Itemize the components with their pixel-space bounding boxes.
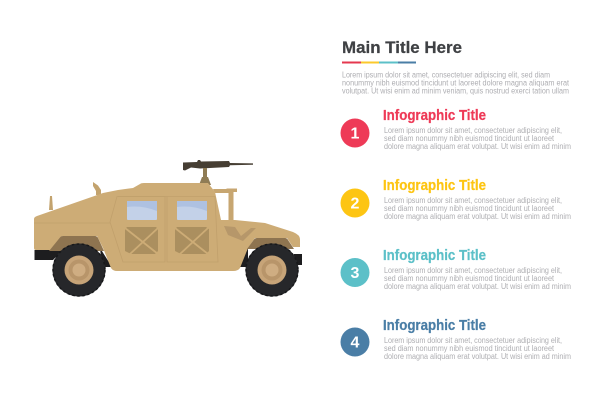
item 4 title: Infographic Title: [383, 318, 486, 334]
item 3 text: [384, 266, 571, 291]
item 3 title: Infographic Title: [383, 248, 486, 264]
item 2 text: dolore magna aliquam erat volutpat. Ut wisi enim ad minim: [384, 212, 571, 221]
intro text: nonummy nibh euismod tincidunt ut laoreet dolore magna aliquam erat: [342, 78, 570, 88]
item 2 title: Infographic Title: [383, 178, 486, 194]
military vehicle illustration: [34, 160, 302, 296]
item 1 title: Infographic Title: [383, 108, 486, 124]
item 4 text: [384, 336, 571, 361]
item 3: [340, 248, 571, 291]
item 3 text: Lorem ipsum dolor sit amet, consectetuer adipiscing elit,: [384, 266, 562, 275]
badge 3: [340, 258, 370, 287]
item 2 text: sed diam nonummy nibh euismod tincidunt ut laoreet: [384, 204, 555, 213]
item 3 text: dolore magna aliquam erat volutpat. Ut wisi enim ad minim: [384, 282, 571, 291]
item 1 text: sed diam nonummy nibh euismod tincidunt ut laoreet: [384, 134, 555, 143]
hood vent: [224, 226, 256, 241]
icon: antenna: [49, 196, 53, 210]
main title: Main Title Here: [342, 38, 462, 57]
icon: hook antenna: [93, 182, 101, 195]
badge 1: 1: [351, 126, 360, 142]
item 4 text: sed diam nonummy nibh euismod tincidunt ut laoreet: [384, 344, 555, 353]
item 4: [340, 318, 571, 361]
item 2: [340, 178, 571, 221]
wheel arch front: [49, 236, 104, 251]
window: front door: [177, 201, 207, 220]
badge 2: 2: [351, 196, 360, 212]
badge 4: 4: [351, 334, 360, 352]
intro text: Lorem ipsum dolor sit amet, consectetuer adipiscing elit, sed diam: [342, 70, 550, 80]
vehicle body: [34, 183, 300, 271]
item 1 text: [384, 126, 571, 151]
body panel lines: [34, 196, 218, 262]
title underline: [342, 62, 416, 64]
intro text: [342, 70, 570, 96]
item 4 text: Lorem ipsum dolor sit amet, consectetuer adipiscing elit,: [384, 336, 562, 345]
icon: rear post: [213, 188, 237, 221]
badge 1: [340, 118, 370, 148]
item 2 text: [384, 196, 571, 221]
intro text: volutpat. Ut wisi enim ad minim veniam, quis nostrud exerci tation ullam: [342, 86, 569, 96]
right wheel: [246, 244, 298, 296]
item 4 text: dolore magna aliquam erat volutpat. Ut wisi enim ad minim: [384, 352, 571, 361]
badge 3: 3: [351, 265, 360, 282]
item 1 text: dolore magna aliquam erat volutpat. Ut wisi enim ad minim: [384, 142, 571, 151]
badge 2: [340, 188, 370, 218]
badge 4: [340, 328, 370, 356]
icon: mounted machine gun: [183, 160, 253, 178]
window: rear door: [127, 201, 157, 220]
wheel arch rear: [247, 238, 294, 249]
door panel X left: [125, 227, 158, 254]
item 3 text: sed diam nonummy nibh euismod tincidunt ut laoreet: [384, 274, 555, 283]
black bumpers: [34, 248, 302, 267]
left wheel: [52, 244, 106, 296]
icon: gun mount base: [199, 177, 211, 185]
door panel X right: [175, 227, 209, 254]
item 1: [340, 108, 571, 151]
item 1 text: Lorem ipsum dolor sit amet, consectetuer adipiscing elit,: [384, 126, 562, 135]
item 2 text: Lorem ipsum dolor sit amet, consectetuer adipiscing elit,: [384, 196, 562, 205]
